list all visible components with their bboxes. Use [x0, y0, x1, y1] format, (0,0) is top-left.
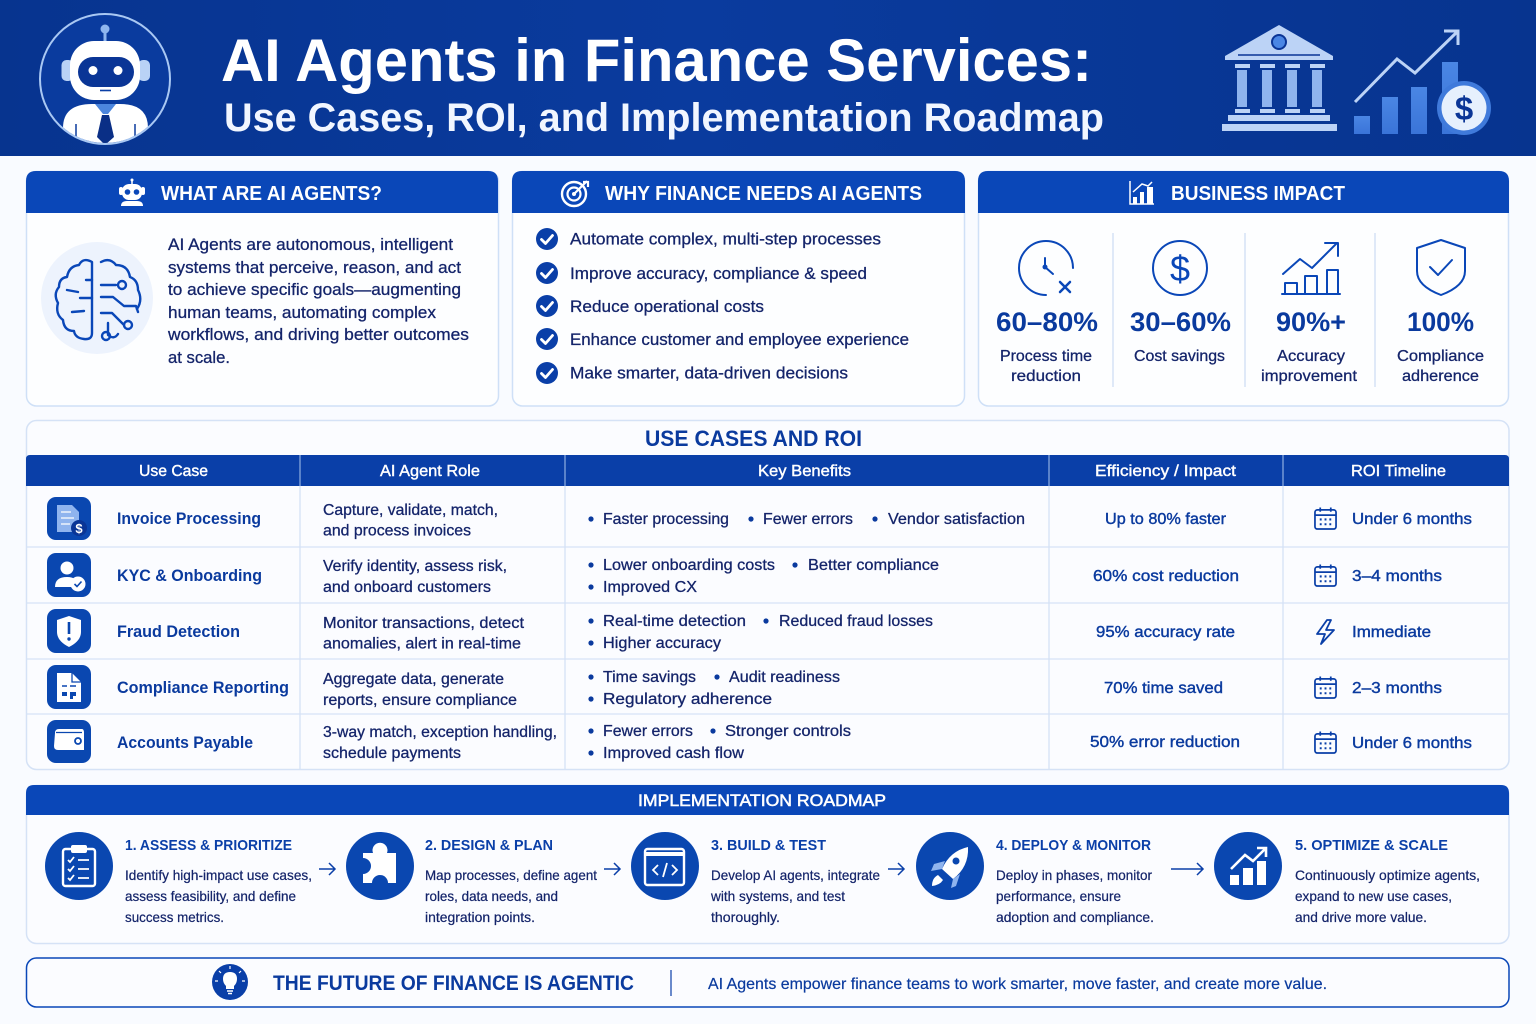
stat: cost savings [1130, 241, 1231, 365]
step 2: design and plan: integration points. [425, 909, 535, 925]
arrow 3 [888, 863, 904, 875]
row: fraud detection: Higher accuracy [603, 635, 721, 652]
stat: cost savings: 30–60% [1130, 307, 1231, 337]
arrow 2 [604, 863, 620, 875]
step 1: assess and prioritize [45, 832, 312, 925]
row: compliance reporting: Aggregate data, generate [323, 671, 504, 688]
icon: puzzle piece [346, 832, 414, 900]
icon: rocket [916, 832, 984, 900]
step 5: optimize and scale: Continuously optimize agents, [1295, 867, 1480, 883]
icon: shield alert [47, 609, 91, 653]
stat: compliance adherence: 100% [1407, 307, 1474, 337]
icon: clipboard checklist [45, 832, 113, 900]
checklist: Improve accuracy, compliance & speed [570, 264, 867, 283]
description text: human teams, automating complex [168, 303, 436, 322]
footer callout [26, 958, 1509, 1007]
description text [167, 235, 469, 367]
row: KYC and onboarding: 3–4 months [1352, 568, 1442, 585]
subtitle: Use Cases, ROI, and Implementation Roadmap [224, 96, 1104, 140]
icon: target [562, 181, 588, 206]
row: accounts payable: Fewer errors [603, 723, 693, 740]
step 2: design and plan: roles, data needs, and [425, 888, 558, 904]
arrow 1 [319, 863, 335, 875]
row: invoice processing: Under 6 months [1352, 511, 1472, 528]
panel: why finance needs AI agents [512, 171, 965, 406]
row: invoice processing: Invoice Processing [117, 509, 261, 528]
stat: accuracy improvement: improvement [1261, 368, 1358, 385]
heading: BUSINESS IMPACT [1171, 183, 1345, 205]
row: invoice processing [47, 497, 1472, 540]
row: fraud detection: Immediate [1352, 624, 1431, 641]
arrow 4 [1171, 863, 1203, 875]
checklist: Reduce operational costs [570, 297, 764, 316]
step 5: optimize and scale: expand to new use cases, [1295, 888, 1452, 904]
description text: systems that perceive, reason, and act [168, 258, 461, 277]
icon: bar chart [1130, 181, 1154, 204]
step 2: design and plan [346, 832, 597, 925]
description text: AI Agents are autonomous, intelligent [168, 235, 453, 254]
row: KYC and onboarding: Lower onboarding costs [603, 557, 775, 574]
icon: report document [47, 665, 91, 709]
row: invoice processing: Up to 80% faster [1105, 511, 1227, 528]
icon: light bulb [212, 964, 248, 1000]
callout text: AI Agents empower finance teams to work smarter, move faster, and create more value. [708, 976, 1327, 993]
step 5: optimize and scale: and drive more value. [1295, 909, 1427, 925]
stat: compliance adherence [1397, 240, 1484, 385]
row: fraud detection [47, 609, 1431, 653]
step 2: design and plan: 2. DESIGN & PLAN [425, 837, 553, 854]
panel: what are AI agents [26, 171, 498, 406]
stat: process time reduction: Process time [1000, 348, 1092, 365]
step 1: assess and prioritize: 1. ASSESS & PRIORITIZE [125, 837, 292, 854]
panel: use cases and ROI [26, 420, 1509, 770]
row: invoice processing: Fewer errors [763, 511, 853, 528]
step 4: deploy and monitor: Deploy in phases, monitor [996, 867, 1152, 883]
row: compliance reporting: 70% time saved [1104, 680, 1223, 697]
heading: WHY FINANCE NEEDS AI AGENTS [605, 183, 922, 205]
stat: compliance adherence: Compliance [1397, 348, 1484, 365]
table header: Key Benefits [758, 463, 851, 480]
step 3: build and test: 3. BUILD & TEST [711, 837, 826, 854]
description text: at scale. [168, 348, 230, 367]
stat: process time reduction [996, 241, 1098, 385]
row: accounts payable: schedule payments [323, 745, 461, 762]
icon: growth chart [1214, 832, 1282, 900]
row: accounts payable: Under 6 months [1352, 735, 1472, 752]
row: fraud detection: Fraud Detection [117, 622, 240, 641]
row: invoice processing: Faster processing [603, 511, 729, 528]
step 3: build and test [631, 832, 880, 925]
row: compliance reporting: Time savings [603, 669, 696, 686]
callout heading: THE FUTURE OF FINANCE IS AGENTIC [273, 972, 634, 995]
step 3: build and test: with systems, and test [710, 888, 845, 904]
icon: growth chart with dollar coin [1354, 31, 1491, 135]
stat: accuracy improvement: 90%+ [1276, 307, 1346, 337]
checklist: Automate complex, multi-step processes [570, 230, 881, 248]
section heading: USE CASES AND ROI [645, 426, 862, 451]
icon: robot agent in circle [40, 14, 170, 150]
row: KYC and onboarding: Verify identity, assess risk, [323, 558, 507, 575]
step 5: optimize and scale: 5. OPTIMIZE & SCALE [1295, 837, 1448, 854]
icon: lightning bolt [1317, 620, 1334, 644]
row: KYC and onboarding: 60% cost reduction [1093, 568, 1239, 585]
row: invoice processing: Vendor satisfaction [888, 511, 1025, 528]
stat: process time reduction: reduction [1011, 368, 1081, 385]
step 5: optimize and scale [1214, 832, 1480, 925]
table header: AI Agent Role [380, 463, 480, 480]
icon: bank building [1222, 25, 1337, 131]
step 1: assess and prioritize: Identify high-impact use cases, [125, 867, 312, 883]
row: fraud detection: Monitor transactions, detect [323, 615, 525, 632]
row: accounts payable [47, 720, 1472, 763]
row: accounts payable: 3-way match, exception handling, [323, 724, 557, 741]
row: compliance reporting: Regulatory adherence [603, 691, 772, 708]
heading: IMPLEMENTATION ROADMAP [638, 791, 886, 810]
row: fraud detection: Reduced fraud losses [779, 613, 933, 630]
panel: business impact [978, 171, 1509, 406]
row: KYC and onboarding: Better compliance [808, 557, 939, 574]
row: KYC and onboarding [47, 553, 1442, 597]
icon: growth chart with dollar coin: $ [1455, 90, 1473, 127]
table header: Use Case [139, 463, 208, 480]
row: invoice processing: and process invoices [323, 522, 471, 540]
row: fraud detection: Real-time detection [603, 613, 746, 630]
checklist: Make smarter, data-driven decisions [570, 364, 848, 382]
step 1: assess and prioritize: success metrics. [125, 909, 224, 925]
icon: wallet [47, 720, 91, 763]
row: fraud detection: anomalies, alert in real-time [323, 636, 521, 652]
checklist: Enhance customer and employee experience [570, 330, 909, 349]
header banner [0, 0, 1536, 156]
stat: cost savings: $ [1170, 248, 1190, 289]
checklist [536, 228, 909, 384]
step 4: deploy and monitor: performance, ensure [996, 888, 1121, 904]
step 1: assess and prioritize: assess feasibility, and define [125, 888, 296, 904]
row: fraud detection: 95% accuracy rate [1096, 624, 1235, 641]
table header: Efficiency / Impact [1095, 463, 1237, 480]
row: accounts payable: 50% error reduction [1090, 734, 1240, 751]
icon: invoice: $ [75, 521, 83, 536]
row: KYC and onboarding: Improved CX [603, 579, 697, 596]
row: KYC and onboarding: KYC & Onboarding [117, 566, 262, 585]
icon: code window [631, 832, 699, 900]
heading: WHAT ARE AI AGENTS? [161, 183, 382, 205]
icon: small robot [119, 178, 145, 206]
row: compliance reporting: Audit readiness [729, 669, 840, 686]
stat: compliance adherence: adherence [1402, 368, 1479, 385]
stat: cost savings: Cost savings [1134, 348, 1225, 365]
table header: ROI Timeline [1351, 463, 1446, 480]
row: KYC and onboarding: and onboard customers [323, 579, 491, 596]
step 4: deploy and monitor: 4. DEPLOY & MONITOR [996, 837, 1151, 854]
icon: brain with circuits [41, 242, 153, 354]
table header [26, 455, 1509, 486]
step 4: deploy and monitor [916, 832, 1154, 925]
row: compliance reporting: Compliance Reporting [117, 678, 289, 697]
step 4: deploy and monitor: adoption and compliance. [996, 909, 1154, 925]
row: accounts payable: Improved cash flow [603, 745, 744, 762]
row: compliance reporting: reports, ensure compliance [323, 692, 517, 709]
row: compliance reporting [47, 665, 1442, 709]
row: compliance reporting: 2–3 months [1352, 680, 1442, 697]
row: invoice processing: Capture, validate, match, [323, 502, 498, 519]
row: accounts payable: Accounts Payable [117, 733, 253, 752]
step 3: build and test: Develop AI agents, integrate [711, 867, 880, 883]
description text: to achieve specific goals—augmenting [168, 280, 461, 299]
step 3: build and test: thoroughly. [711, 909, 780, 925]
icon: user check [47, 553, 91, 597]
title: AI Agents in Finance Services: [221, 27, 1092, 94]
stat: accuracy improvement: Accuracy [1277, 348, 1345, 365]
stat: accuracy improvement [1261, 243, 1358, 385]
stat: process time reduction: 60–80% [996, 307, 1098, 337]
icon: invoice [47, 497, 91, 540]
description text: workflows, and driving better outcomes [167, 325, 469, 344]
panel: implementation roadmap [26, 785, 1509, 944]
row: accounts payable: Stronger controls [725, 723, 851, 740]
step 2: design and plan: Map processes, define agent [425, 867, 597, 883]
